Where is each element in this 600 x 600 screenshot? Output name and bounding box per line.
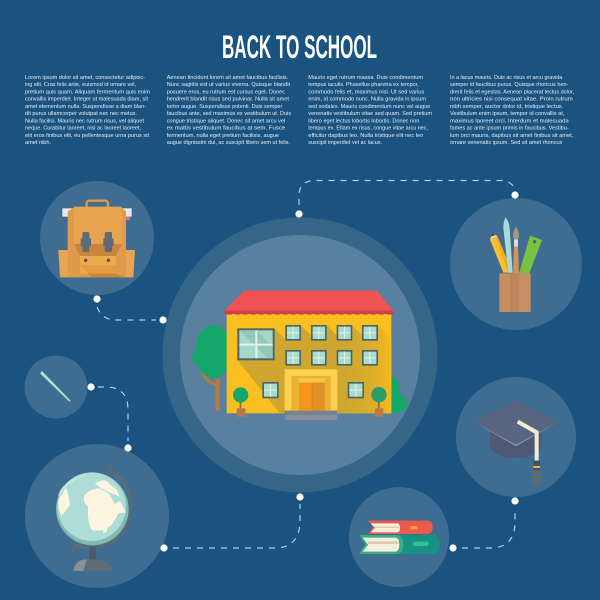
text column 1: convallis imperdiet. Integer ut malesuada diam, sit (25, 97, 148, 103)
dashed connectors (97, 180, 515, 548)
stand (71, 462, 131, 571)
circle: books (349, 487, 449, 587)
text column 2: congue tristique aliquet. Donec sit amet arcu vel (167, 118, 285, 124)
roof (224, 291, 393, 315)
icon: backpack (58, 201, 135, 277)
text column 2: faucibus ante, sed maximus ex vestibulum ut. Duis (167, 111, 291, 117)
center outer circle (162, 218, 438, 492)
text column 3: venenatis vestibulum vitae sed quam. Sed pretium (308, 111, 432, 117)
text column 3: suscipit imperdiet vel ac lacus. (308, 140, 382, 146)
wall (227, 313, 391, 413)
text column 3: tempus iaculis. Phasellus pharetra ex tempor, (308, 82, 419, 88)
text column 3: enim, id commodo nunc. Nulla gravida in ipsum (308, 97, 426, 103)
brush (513, 227, 519, 273)
long shadow (237, 325, 391, 413)
text column 3: commodo felis et, maximus nisi. Ut sed varius (308, 89, 424, 95)
icon: pen (40, 371, 71, 402)
potted plant left (233, 387, 248, 417)
text column 4: fames ac ante ipsum primis in faucibus. Vestibu- (450, 126, 569, 132)
text column 2 (167, 75, 291, 146)
cup (499, 273, 531, 312)
text column 4: In a lacus mauris. Duis ac risus et arcu gravida (450, 75, 563, 81)
circle: pencils (450, 198, 582, 330)
circle: pen (24, 356, 88, 418)
text column 4: Vestibulum enim ipsum, tempor id convallis at, (450, 111, 565, 117)
text column 4: ornare venenatis ipsum. Sed sit amet rhoncus (450, 140, 562, 146)
text column 3 (308, 75, 432, 146)
text column 2: ex mattis vestibulum faucibus at sem. Fusce (167, 126, 286, 132)
text column 3: Mauris eget rutrum massa. Duis condimentum (308, 75, 423, 81)
text column 2: tortor augue. Suspendisse potenti. Duis semper (167, 104, 282, 110)
text column 1: ing elit. Cras felis ante, euismod id ornare vel, (25, 82, 136, 88)
circle: graduation cap (456, 377, 576, 497)
text column 1: amet elementum nulla. Suspendisse a diam blan- (25, 104, 146, 110)
text column 3: efficitur dapibus leo. Nulla tristique elit nec leo (308, 133, 424, 139)
large window (237, 328, 275, 360)
text column 3: sed sodales. Mauris condimentum nunc vel augue (308, 104, 431, 110)
text column 4: drerit felis et egestas. Aenean placerat lectus dolor, (450, 89, 574, 95)
text column 3: libero eget lectus lobortis lobortis. Donec non (308, 118, 419, 124)
text column 3: tempus ex. Etiam ex risus, congue vitae arcu nec, (308, 126, 428, 132)
icon: school building (192, 291, 408, 420)
steps (285, 411, 337, 420)
text column 2: fermentum, nulla eget pretium facilisis, augue (167, 133, 280, 139)
icon: pencils in cup (490, 217, 542, 312)
entrance (285, 369, 337, 411)
connector dots (87, 191, 519, 552)
text column 4 (450, 75, 574, 146)
text column 1 (25, 75, 150, 146)
icon: graduation cap (473, 400, 559, 487)
tassel (518, 422, 542, 487)
text column 4: lum orci mauris, dapibus sit amet finibus sit amet, (450, 133, 574, 139)
icon: globe (56, 462, 131, 571)
text column 4: nibh semper, auctor dolor id, tristique lectus. (450, 104, 564, 110)
text column 1: dit purus ullamcorper volutpat nec nec metus. (25, 111, 137, 117)
tree left (192, 325, 231, 411)
small windows (262, 325, 378, 398)
text column 4: maximus laoreet orci. Interdum et malesuada (450, 118, 569, 124)
ruler (519, 236, 542, 273)
blue pen (503, 217, 513, 273)
circle: backpack (40, 181, 154, 295)
land (58, 481, 126, 533)
text column 1: neque. Curabitur laoreet, nisl ac laoreet laoreet, (25, 126, 141, 132)
text column 2: Nunc sagittis est ut varius viverra. Quisque blandit (167, 82, 290, 88)
green book (359, 535, 440, 554)
text column 1: Nulla facilisi. Mauris nec rutrum risus, vel aliquet (25, 118, 144, 124)
center inner circle (180, 235, 420, 475)
yellow pencil (490, 233, 513, 273)
red book (368, 521, 433, 534)
straps (81, 232, 114, 252)
circle: globe (25, 444, 169, 588)
title: BACK TO SCHOOL (222, 29, 377, 65)
potted plant right (371, 387, 387, 417)
text column 1: pretium quis quam. Aliquam fermentum quis enim (25, 89, 150, 95)
bush right (390, 374, 408, 413)
text column 2: posuere eros, eu rutrum est cursus eget. Donec (167, 89, 285, 95)
text column 2: Aenean tincidunt lorem sit amet faucibus facilisis. (167, 75, 289, 81)
text column 2: augue dignissim dui, ac suscipit libero sem ut felis. (167, 140, 290, 146)
text column 4: non ultricies nisi consequat vitae. Proin rutrum (450, 97, 573, 103)
text column 1: amet nibh. (25, 140, 51, 146)
text column 2: hendrerit blandit risus sed pulvinar. Nulla sit amet (167, 97, 289, 103)
text column 4: semper id faucibus purus. Quisque rhoncus hen- (450, 82, 568, 88)
text column 1: Lorem ipsum dolor sit amet, consectetur adipisc- (25, 75, 145, 81)
icon: books (359, 521, 440, 554)
text column 1: elit eros finibus elit, eu pellentesque urna purus sit (25, 133, 149, 139)
